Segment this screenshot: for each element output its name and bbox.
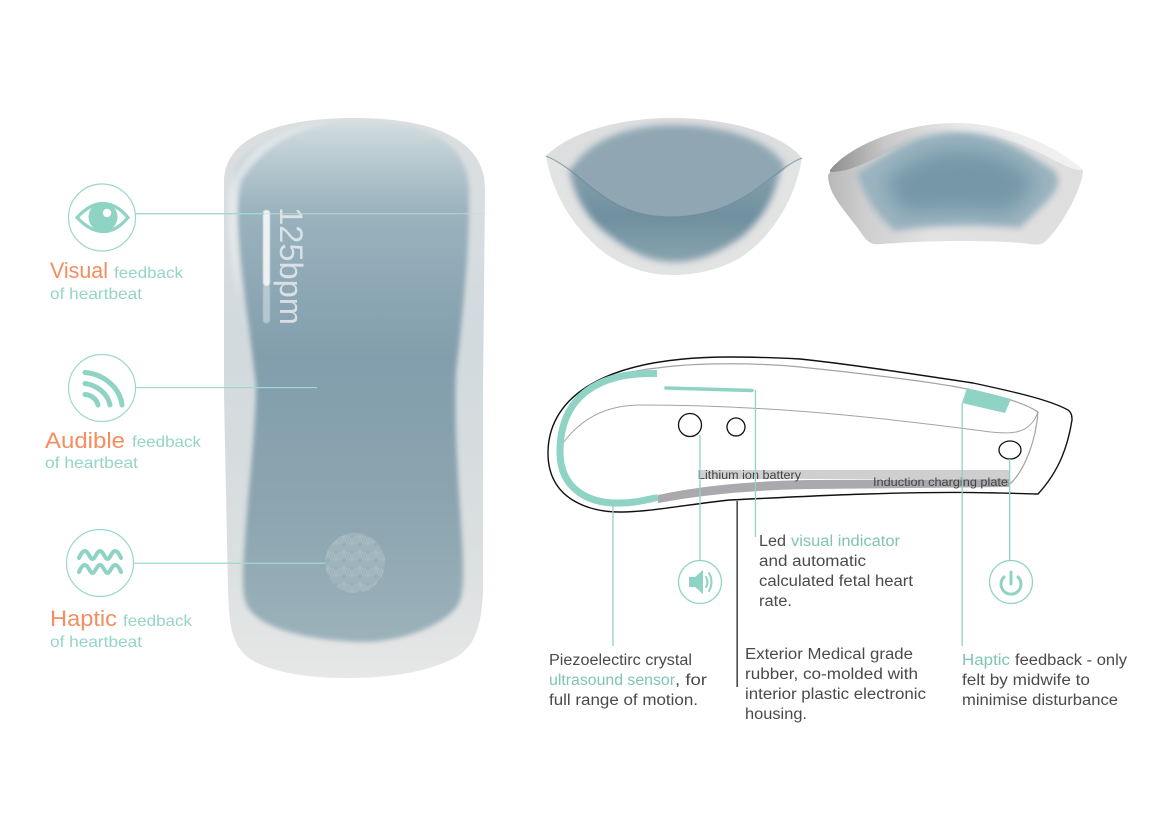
haptic feedback callout (50, 530, 325, 651)
housing inner lines (558, 364, 1038, 484)
outer shell (224, 118, 485, 678)
icon: sound waves (68, 354, 136, 422)
main device front view (224, 118, 485, 678)
text: ultrasound sensor: , for (675, 672, 707, 689)
leader line (136, 387, 317, 388)
battery label: Lithium ion battery (698, 470, 801, 482)
text: haptic feedback: Haptic (962, 652, 1010, 669)
text: LED indicator: visual indicator (791, 533, 900, 550)
end view: saddle (828, 123, 1083, 245)
text: exterior rubber: Exterior Medical grade (745, 646, 913, 663)
exterior outline (548, 357, 1072, 512)
text: LED indicator: rate. (759, 593, 792, 610)
ultrasound sensor band (560, 373, 658, 503)
haptic motor (962, 388, 1011, 413)
haptic pattern disc (325, 533, 385, 593)
text: exterior rubber: housing. (745, 706, 807, 723)
text: exterior rubber: rubber, co-molded with (745, 666, 918, 683)
inner blue screen (228, 122, 469, 642)
audible feedback callout (45, 354, 317, 472)
end view: bowl (546, 118, 802, 275)
crease line (546, 156, 802, 217)
blue interior core (885, 150, 1035, 213)
text: LED indicator: calculated fetal heart (759, 573, 914, 590)
label (50, 258, 184, 303)
text: haptic feedback: minimise disturbance (962, 692, 1118, 709)
icon: speaker (678, 560, 722, 604)
text: haptic feedback: felt by midwife to (962, 672, 1090, 689)
text: LED indicator: Led (759, 533, 786, 550)
shell (546, 118, 802, 275)
label: Visual (50, 258, 108, 283)
leader lines (612, 390, 1010, 687)
upper grey lip (546, 118, 802, 217)
speaker port (678, 414, 702, 436)
text: LED indicator: and automatic (759, 553, 866, 570)
label: feedback (132, 434, 202, 451)
blue interior (857, 132, 1058, 231)
label (50, 606, 193, 651)
text: ultrasound sensor: Piezoelectirc crystal (549, 652, 692, 669)
leader line (134, 563, 325, 564)
upper lip (830, 123, 1083, 172)
icon: haptic waves (66, 530, 134, 596)
text: exterior rubber: interior plastic electronic (745, 686, 926, 703)
power button (999, 441, 1021, 459)
label (45, 428, 202, 472)
text: ultrasound sensor (549, 652, 707, 709)
label: of heartbeat (50, 634, 143, 651)
heart rate reading: 125bpm (273, 207, 309, 325)
text: exterior rubber (745, 646, 926, 723)
text: ultrasound sensor: ultrasound sensor (549, 672, 675, 689)
label: of heartbeat (45, 455, 139, 472)
inner shell line (563, 405, 1038, 443)
text: haptic feedback (962, 652, 1127, 709)
text: LED indicator (759, 533, 914, 610)
visual feedback callout (50, 184, 485, 303)
shell (828, 123, 1083, 245)
induction plate (658, 479, 1009, 503)
label: of heartbeat (50, 286, 143, 303)
label: Haptic (50, 606, 117, 631)
leader line (136, 213, 485, 214)
icon: eye (68, 184, 136, 251)
LED strip (666, 388, 752, 390)
side section diagram (548, 357, 1072, 512)
blue interior lower (569, 150, 781, 262)
label: Audible (45, 428, 125, 453)
charging plate label: Induction charging plate (873, 475, 1008, 489)
label: feedback (123, 613, 193, 630)
blue interior upper (572, 125, 784, 230)
icon: power (990, 560, 1032, 604)
text: haptic feedback: feedback - only (1015, 652, 1127, 669)
sensor port (727, 418, 745, 436)
label: feedback (114, 265, 184, 282)
text: ultrasound sensor: full range of motion. (549, 692, 698, 709)
light grey battery (698, 470, 1009, 479)
LED heart rate bar (263, 210, 270, 323)
